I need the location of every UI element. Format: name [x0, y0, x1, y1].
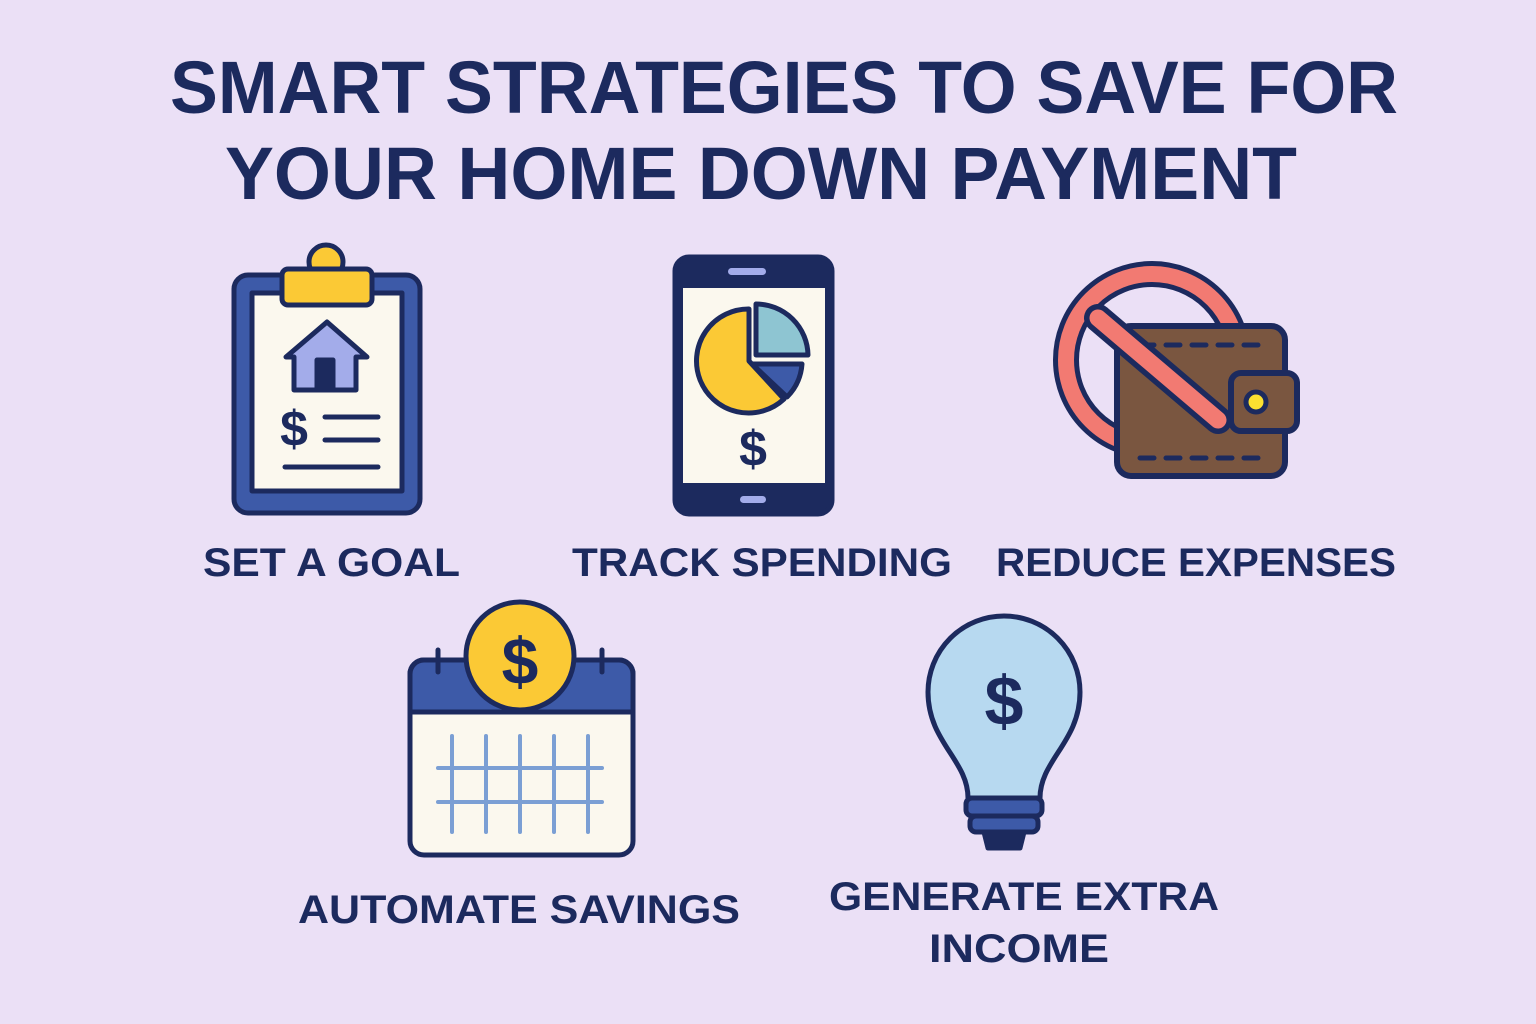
label: generate extra income: GENERATE EXTRA [829, 875, 1219, 919]
title [170, 46, 1398, 215]
icon: clipboard [234, 245, 420, 513]
title: YOUR HOME DOWN PAYMENT [225, 132, 1297, 215]
icon: calendar with coin [410, 602, 633, 855]
icon: clipboard dollar: $ [280, 401, 308, 457]
label: generate extra income [829, 875, 1219, 971]
icon: bulb dollar: $ [985, 662, 1023, 740]
label: generate extra income: INCOME [929, 927, 1109, 971]
label: automate savings: AUTOMATE SAVINGS [298, 888, 740, 932]
label: reduce expenses: REDUCE EXPENSES [996, 541, 1396, 585]
icon: phone [675, 257, 832, 514]
label: track spending: TRACK SPENDING [572, 541, 952, 585]
icon: wallet with no sign [1066, 274, 1297, 476]
icon: coin dollar: $ [502, 624, 538, 698]
label: set a goal: SET A GOAL [203, 541, 460, 585]
title: SMART STRATEGIES TO SAVE FOR [170, 46, 1398, 129]
icon: lightbulb [928, 616, 1080, 848]
icon: phone dollar: $ [739, 421, 767, 477]
